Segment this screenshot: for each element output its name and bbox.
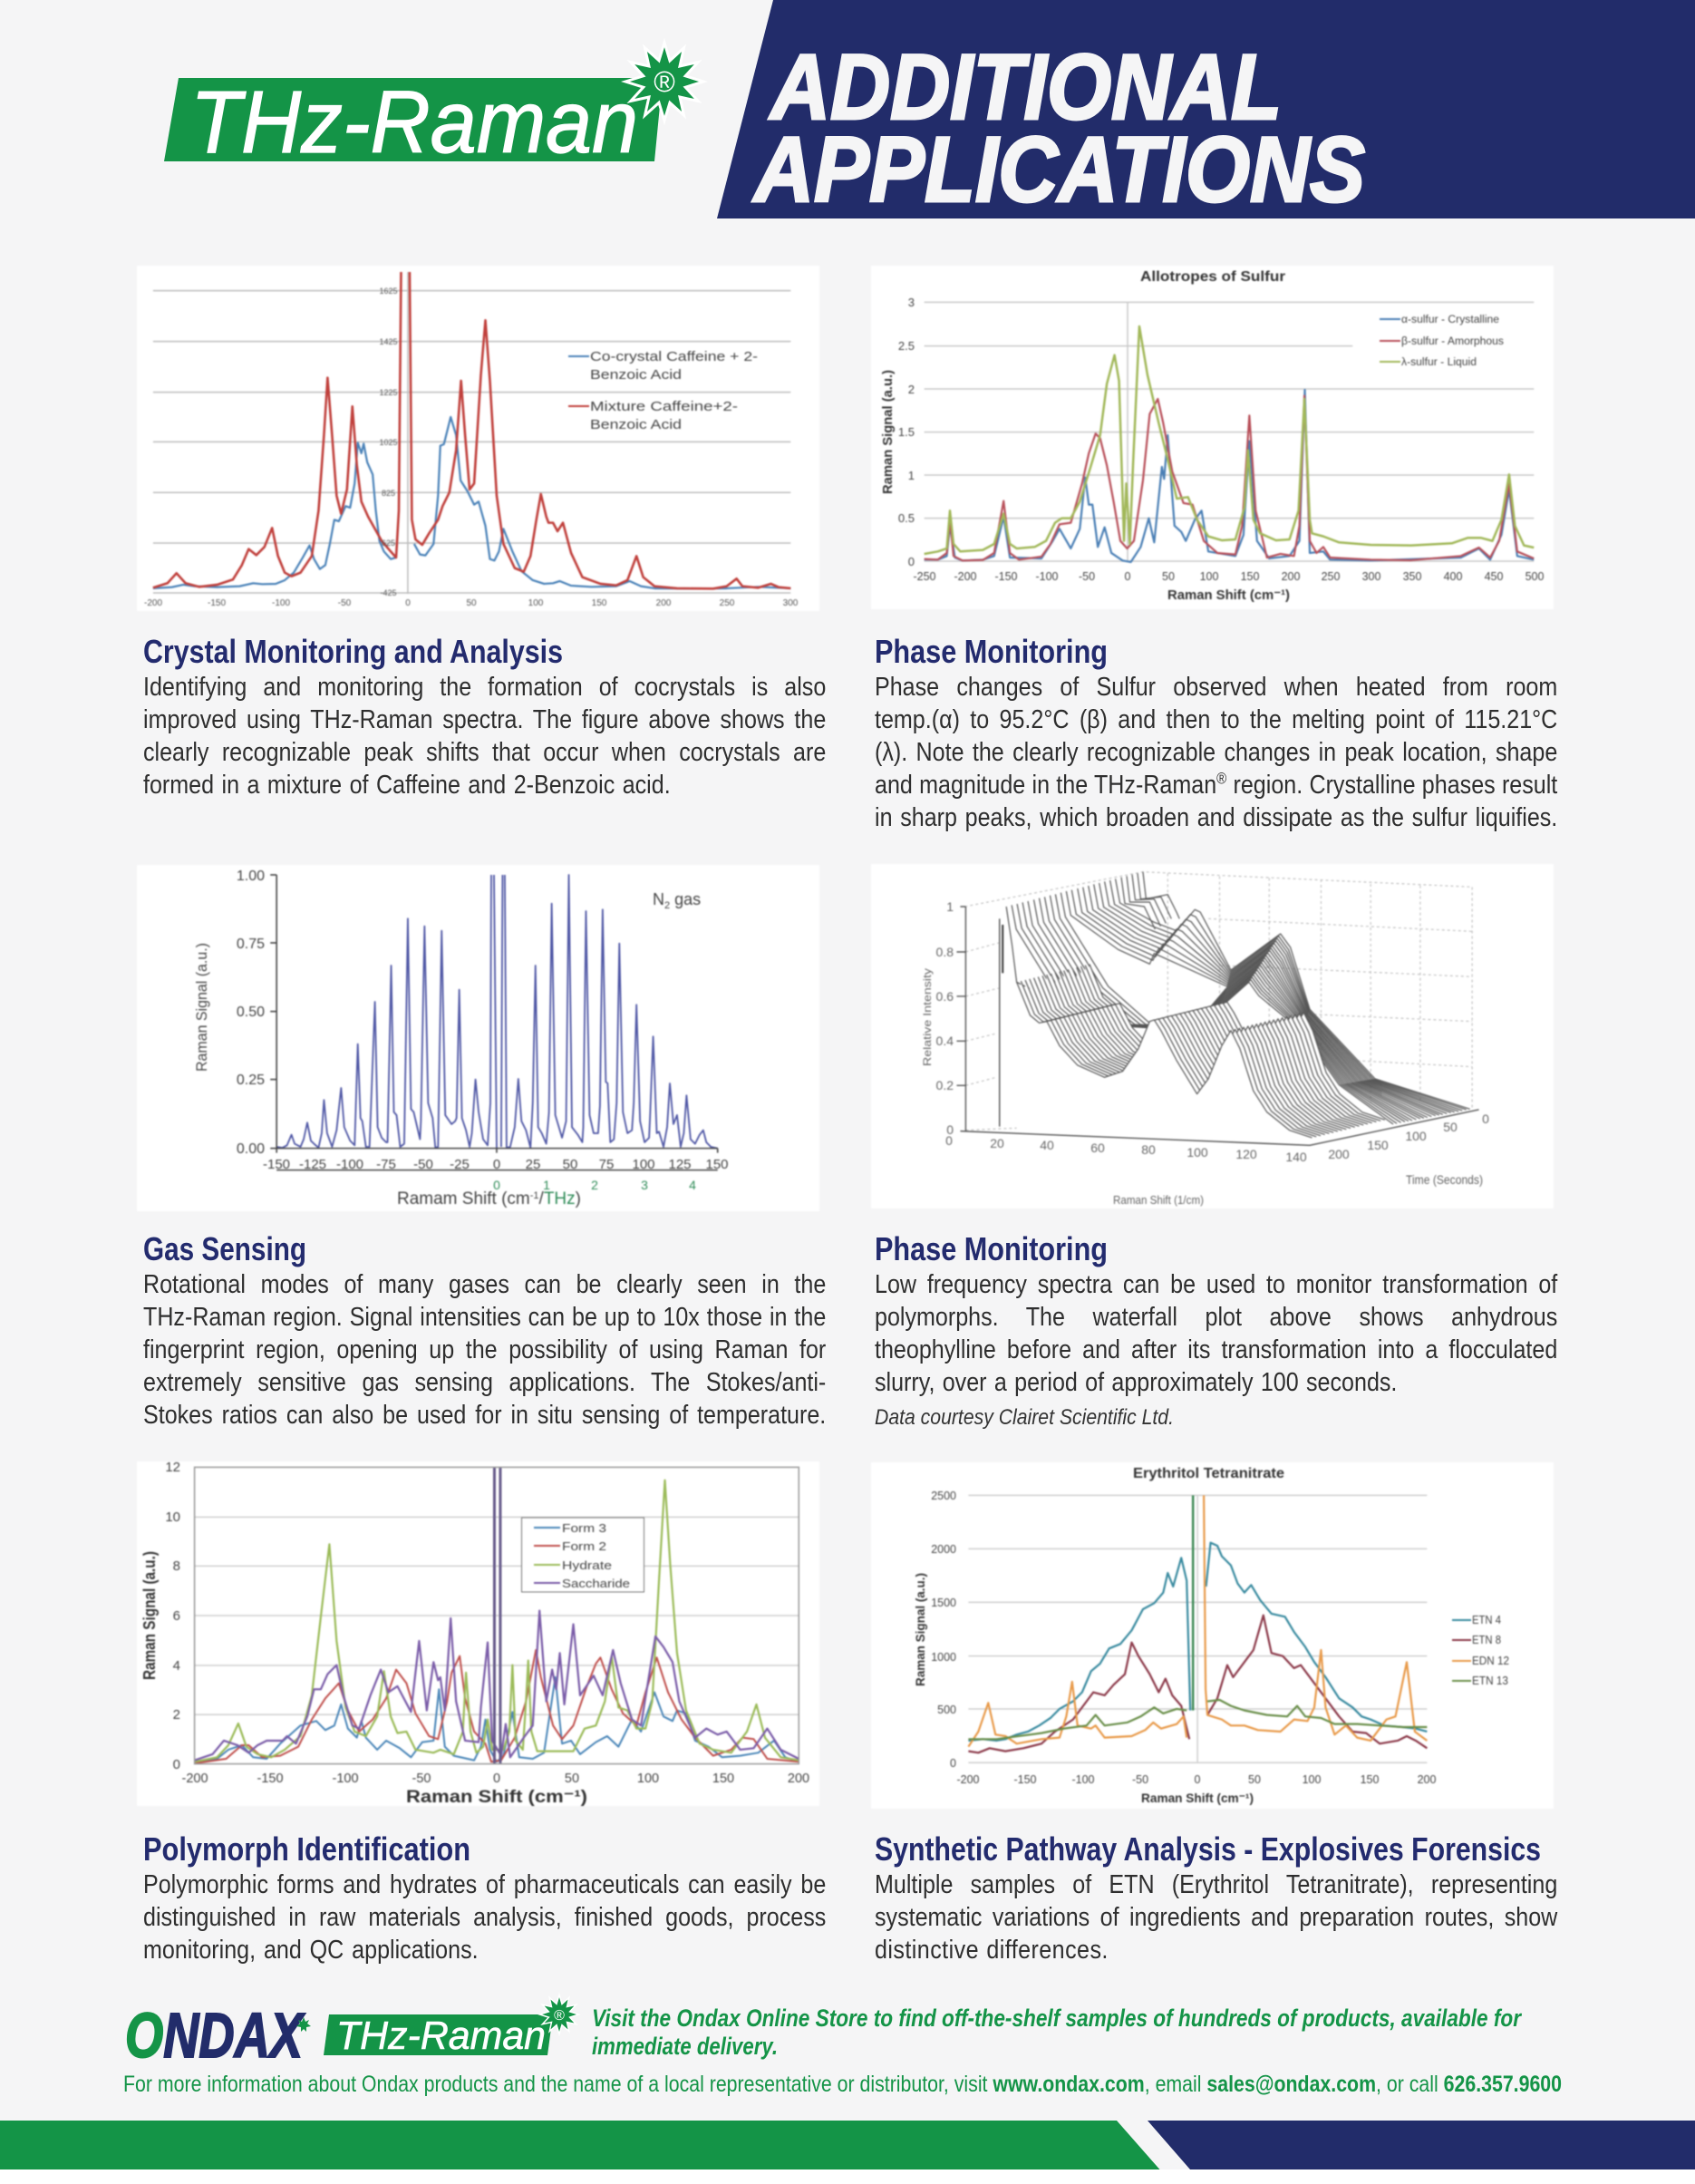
x axis labels: 25 [526, 1157, 540, 1172]
x axis title: THz) [544, 1189, 581, 1208]
x axis title: Raman Shift (cm⁻¹) [1167, 587, 1290, 603]
x axis labels: 150 [712, 1771, 734, 1786]
header band: ADDITIONAL [768, 35, 1282, 139]
annotation: N2 gas: gas [670, 890, 701, 908]
x axis labels: -150 [1013, 1773, 1037, 1786]
x axis labels: 450 [1485, 570, 1503, 583]
y axis labels: 0.6 [936, 989, 954, 1004]
footer call to action: Visit the Ondax Online Store to find off-the-shelf samples of hundreds of products, available for [592, 2004, 1522, 2032]
x axis labels: 100 [1303, 1773, 1321, 1786]
text: synthetic pathway: systematic variations of ingredients and preparation routes, show [875, 1903, 1557, 1932]
curve: co-crystal [153, 417, 790, 588]
curve: Form 3 [195, 1677, 799, 1762]
legend [1452, 1614, 1509, 1687]
y axis labels [237, 869, 265, 1157]
legend: ETN 4 [1472, 1614, 1501, 1626]
y axis labels: 0 [950, 1757, 956, 1770]
y axis labels: 1 [908, 469, 915, 482]
x axis labels: 0 [493, 1771, 500, 1786]
text: synthetic pathway: Multiple samples of ETN (Erythritol Tetranitrate), representing [875, 1870, 1557, 1899]
heading: Polymorph Identification: Polymorph Identification [143, 1830, 470, 1868]
x axis labels: 500 [1526, 570, 1544, 583]
x axis labels [144, 598, 799, 608]
x axis labels: -25 [450, 1157, 470, 1172]
y axis labels: 8 [173, 1558, 180, 1574]
chart: polymorph spectra [137, 1460, 819, 1807]
raman shift tick labels: 140 [1285, 1150, 1307, 1164]
curve: Hydrate [195, 1480, 799, 1762]
logo: Ondax: ONDAX [125, 2000, 305, 2071]
y axis labels: 1.5 [898, 425, 915, 439]
x axis labels: 50 [1248, 1773, 1261, 1786]
y axis title: Raman Signal (a.u.) [880, 370, 896, 494]
legend: Benzoic Acid [590, 367, 682, 383]
raman shift tick labels: 100 [1186, 1145, 1208, 1160]
x axis labels: -50 [412, 1771, 431, 1786]
y axis labels: 0.50 [237, 1005, 265, 1020]
x axis labels: 50 [466, 598, 477, 608]
x axis labels: -150 [257, 1771, 284, 1786]
x axis labels: -50 [1079, 570, 1095, 583]
x axis labels: 300 [783, 598, 799, 608]
time tick labels: 0 [1482, 1111, 1489, 1126]
x axis labels: 250 [720, 598, 735, 608]
text: phase monitoring polymorphs: Low frequency spectra can be used to monitor transformation of [875, 1270, 1557, 1299]
curve: ETN 13 [968, 1700, 1427, 1739]
text: gas sensing: extremely sensitive gas sensing applications. The Stokes/anti- [143, 1368, 826, 1397]
x axis labels: -50 [1132, 1773, 1148, 1786]
chart: N2 gas rotational spectrum [137, 865, 819, 1211]
chart title: Erythritol Tetranitrate [1133, 1466, 1284, 1481]
text: phase monitoring sulfur: Phase changes of Sulfur observed when heated from room [875, 673, 1557, 702]
y axis labels [898, 296, 915, 568]
data credit: Data courtesy Clairet Scientific Ltd. [875, 1405, 1174, 1430]
text: crystal monitoring: formed in a mixture of Caffeine and 2-Benzoic acid. [143, 771, 671, 800]
y axis title: Raman Signal (a.u.) [140, 1551, 159, 1680]
THz axis labels: 0 [493, 1178, 500, 1192]
legend: Form 2 [562, 1539, 606, 1553]
x axis labels: -75 [376, 1157, 396, 1172]
time tick labels: 100 [1405, 1129, 1427, 1143]
text: phase monitoring sulfur: temp.(α) to 95.2°C (β) and then to the melting point of 115.21°C [875, 705, 1557, 734]
x axis title: / [539, 1189, 545, 1208]
y axis labels: 0.00 [237, 1141, 265, 1157]
y axis labels: 4 [173, 1658, 180, 1674]
chart: caffeine cocrystal spectra [137, 266, 819, 611]
time tick labels [1328, 1111, 1489, 1161]
raman shift tick labels: 40 [1040, 1138, 1054, 1152]
x axis labels: 150 [705, 1157, 729, 1172]
text: crystal monitoring [143, 673, 826, 800]
text: polymorph identification: distinguished in raw materials analysis, finished goods, process [143, 1903, 826, 1932]
x axis labels: 250 [1322, 570, 1340, 583]
x axis title: -1 [530, 1190, 539, 1201]
text: gas sensing: Stokes ratios can also be used for in situ sensing of temperature. [143, 1401, 826, 1430]
y axis labels: 0.5 [898, 511, 915, 525]
y axis labels: 1625 [379, 286, 398, 296]
x axis labels: -50 [413, 1157, 433, 1172]
y axis labels: 2 [908, 383, 915, 396]
footer call to action: immediate delivery. [592, 2033, 778, 2060]
y axis labels: 3 [908, 296, 915, 309]
y axis labels: 0 [173, 1757, 180, 1772]
curve: beta sulfur [925, 396, 1534, 560]
y axis labels: 1.00 [237, 869, 265, 884]
x axis title: Raman Shift (cm⁻¹) [406, 1788, 587, 1807]
x axis labels: -100 [336, 1157, 363, 1172]
y axis labels: 0.4 [936, 1034, 954, 1048]
x axis labels: 200 [656, 598, 672, 608]
legend: β-sulfur - Amorphous [1401, 336, 1504, 347]
x axis labels: 200 [788, 1771, 809, 1786]
annotation: N2 gas: 2 [664, 900, 670, 911]
y axis labels: 825 [382, 489, 395, 498]
text: crystal monitoring: Identifying and monitoring the formation of cocrystals is also [143, 673, 826, 702]
y axis labels: 625 [382, 539, 395, 548]
chart: theophylline waterfall plot [871, 864, 1554, 1208]
x axis labels: 100 [632, 1157, 655, 1172]
raman shift tick labels: 120 [1235, 1147, 1257, 1161]
x axis labels [181, 1771, 809, 1786]
x axis labels: -150 [208, 598, 226, 608]
x axis labels: 0 [493, 1157, 500, 1172]
y axis labels: 1225 [379, 388, 398, 397]
y axis labels: 1425 [379, 337, 398, 346]
logo: THz-Raman: THz-Raman [190, 73, 638, 171]
THz axis labels: 3 [641, 1178, 648, 1192]
y axis labels: 1 [946, 899, 954, 914]
text: synthetic pathway: distinctive differences. [875, 1936, 1109, 1965]
x axis labels: -200 [954, 570, 977, 583]
THz axis labels [493, 1178, 696, 1192]
text: phase monitoring sulfur: and magnitude in the THz-Raman® region. Crystalline phases result [875, 771, 1557, 800]
footer band [0, 2121, 1695, 2184]
raman shift tick labels [945, 1133, 1307, 1164]
legend: Benzoic Acid [590, 417, 682, 432]
text: gas sensing: THz-Raman region. Signal intensities can be up to 10x those in the [143, 1303, 826, 1332]
x axis labels: 150 [1361, 1773, 1379, 1786]
chart title: Allotropes of Sulfur [1140, 269, 1285, 285]
x axis labels: 50 [565, 1771, 579, 1786]
y axis title: Relative Intensity [921, 968, 934, 1066]
x axis labels: 350 [1403, 570, 1421, 583]
x axis labels: 0 [1125, 570, 1131, 583]
x axis labels: 125 [668, 1157, 692, 1172]
logo: THz-Raman: ® [654, 65, 675, 98]
text: phase monitoring polymorphs: polymorphs. The waterfall plot above shows anhydrous [875, 1303, 1557, 1332]
x axis labels: 100 [637, 1771, 659, 1786]
y axis labels: -425 [380, 588, 397, 597]
text: gas sensing: fingerprint region, opening up the possibility of using Raman for [143, 1335, 826, 1364]
time tick labels: 150 [1367, 1138, 1389, 1152]
x axis labels: 100 [528, 598, 544, 608]
footer contact line: For more information about Ondax products and the name of a local representative or distributor, visit www.ondax.com, email sales@ondax.com, or call 626.357.9600 [123, 2072, 1562, 2097]
curve: ETN 4 [968, 1543, 1427, 1741]
THz axis labels: 1 [543, 1178, 550, 1192]
curve: Form 2 [195, 1650, 799, 1763]
curve: EDN 12 [968, 1495, 1427, 1747]
text: phase monitoring sulfur: (λ). Note the clearly recognizable changes in peak location, shape [875, 738, 1557, 767]
logo: small THz-Raman [324, 1995, 578, 2058]
heading: Phase Monitoring (waterfall): Phase Monitoring [875, 1230, 1108, 1267]
x axis labels: 200 [1418, 1773, 1436, 1786]
waterfall traces: back family [1006, 872, 1470, 1124]
logo: small THz-Raman: ® [554, 2008, 565, 2024]
curve: Saccharide [195, 1611, 799, 1761]
y axis labels [165, 1460, 180, 1772]
x axis labels: 150 [592, 598, 607, 608]
x axis labels [263, 1157, 729, 1172]
heading: Synthetic Pathway Analysis: Synthetic Pathway Analysis - Explosives Forensics [875, 1830, 1541, 1868]
y axis labels: 2500 [931, 1490, 956, 1502]
x axis labels: -200 [956, 1773, 980, 1786]
legend: EDN 12 [1472, 1655, 1509, 1667]
text: polymorph identification: monitoring, and QC applications. [143, 1936, 479, 1965]
y axis labels: 1000 [931, 1651, 956, 1664]
x axis labels: -50 [338, 598, 352, 608]
text: phase monitoring polymorphs: theophylline before and after its transformation into a flocculated [875, 1335, 1557, 1364]
y axis labels [936, 899, 954, 1137]
x axis labels: -100 [272, 598, 290, 608]
x axis labels [913, 570, 1544, 583]
legend: ETN 13 [1472, 1674, 1508, 1687]
x axis labels: -200 [144, 598, 162, 608]
x axis labels: -150 [263, 1157, 290, 1172]
footer call to action [592, 2004, 1522, 2060]
text: gas sensing: Rotational modes of many gases can be clearly seen in the [143, 1270, 826, 1299]
legend [568, 349, 758, 432]
y axis title: Raman Signal (a.u.) [913, 1573, 927, 1686]
time tick labels: 50 [1443, 1120, 1458, 1134]
x axis title: Raman Shift (cm⁻¹) [1141, 1791, 1254, 1805]
text: synthetic pathway [875, 1870, 1557, 1965]
raman shift tick labels: 20 [990, 1136, 1004, 1150]
chart: allotropes of sulfur [871, 266, 1554, 609]
THz axis labels: 2 [591, 1178, 598, 1192]
legend: Hydrate [562, 1558, 612, 1572]
y axis labels [931, 1490, 956, 1770]
raman shift tick labels: 60 [1090, 1141, 1105, 1155]
heading: Gas Sensing: Gas Sensing [143, 1230, 306, 1267]
x axis labels: 75 [599, 1157, 614, 1172]
legend [522, 1518, 644, 1592]
y axis labels: 1025 [379, 438, 398, 447]
x axis labels: -250 [913, 570, 936, 583]
legend: λ-sulfur - Liquid [1401, 357, 1477, 368]
curve: alpha sulfur [925, 390, 1534, 562]
logo: THz-Raman [164, 43, 703, 171]
text: phase monitoring sulfur [875, 673, 1557, 832]
x axis labels [956, 1773, 1436, 1786]
logo: small THz-Raman: THz-Raman [336, 2014, 546, 2058]
THz axis labels: 4 [689, 1178, 696, 1192]
waterfall traces: front family [1017, 964, 1385, 1151]
curve: lambda sulfur [925, 326, 1534, 554]
y axis labels: 1500 [931, 1597, 956, 1609]
legend: α-sulfur - Crystalline [1401, 315, 1499, 325]
x axis labels: -100 [1071, 1773, 1095, 1786]
y axis labels: 500 [937, 1704, 956, 1716]
heading: Phase Monitoring: Phase Monitoring [875, 633, 1108, 670]
y axis labels: 0 [946, 1122, 954, 1137]
text: phase monitoring polymorphs: slurry, over a period of approximately 100 seconds. [875, 1368, 1397, 1397]
text: crystal monitoring: clearly recognizable peak shifts that occur when cocrystals are [143, 738, 826, 767]
heading: Crystal Monitoring and Analysis: Crystal Monitoring and Analysis [143, 633, 563, 670]
y axis labels: 6 [173, 1608, 180, 1624]
x axis labels: 0 [405, 598, 411, 608]
y axis labels: 0.2 [936, 1078, 954, 1092]
raman shift tick labels: 0 [945, 1133, 953, 1148]
x axis labels: -100 [332, 1771, 359, 1786]
raman shift tick labels: 80 [1141, 1142, 1156, 1157]
x axis labels: -100 [1035, 570, 1059, 583]
time tick labels: 200 [1328, 1147, 1350, 1161]
y axis labels: 2 [173, 1707, 180, 1723]
x axis labels: 400 [1444, 570, 1462, 583]
legend: Form 3 [562, 1521, 606, 1535]
text: crystal monitoring: improved using THz-Raman spectra. The figure above shows the [143, 705, 826, 734]
x axis labels: -200 [181, 1771, 208, 1786]
chart: erythritol tetranitrate [871, 1462, 1554, 1809]
x axis title: Ramam Shift (cm [397, 1189, 530, 1208]
y axis labels: 0.8 [936, 945, 954, 959]
x axis title: Raman Shift (1/cm) [1113, 1193, 1204, 1207]
curve: ETN 8 [968, 1616, 1427, 1752]
y axis labels: 0 [908, 555, 915, 568]
header band [717, 0, 1695, 221]
y axis labels: 2000 [931, 1543, 956, 1556]
x axis labels: -125 [299, 1157, 326, 1172]
x axis labels: -150 [994, 570, 1018, 583]
text: phase monitoring sulfur: in sharp peaks, which broaden and dissipate as the sulfur liquifies. [875, 803, 1557, 832]
y axis labels: 10 [165, 1509, 180, 1525]
text: polymorph identification: Polymorphic forms and hydrates of pharmaceuticals can easily be [143, 1870, 826, 1899]
legend [1380, 315, 1504, 368]
text: polymorph identification [143, 1870, 826, 1965]
y axis labels [379, 286, 398, 597]
legend: Mixture Caffeine+2- [590, 399, 738, 414]
legend: Co-crystal Caffeine + 2- [590, 349, 758, 364]
x axis labels: 50 [563, 1157, 577, 1172]
x axis labels: 150 [1241, 570, 1259, 583]
curve: mixture [153, 272, 790, 588]
y axis labels: 0.75 [237, 937, 265, 952]
x axis labels: 200 [1282, 570, 1300, 583]
x axis labels: 100 [1200, 570, 1218, 583]
y axis labels: 2.5 [898, 339, 915, 353]
legend: Saccharide [562, 1577, 630, 1590]
header band: APPLICATIONS [751, 118, 1365, 221]
annotation: N2 gas: N [653, 890, 664, 908]
x axis labels: 50 [1162, 570, 1175, 583]
legend: ETN 8 [1472, 1634, 1501, 1646]
y axis title: Raman Signal (a.u.) [193, 943, 210, 1072]
y axis labels: 0.25 [237, 1073, 265, 1088]
text: gas sensing [143, 1270, 826, 1430]
x axis labels: 0 [1195, 1773, 1201, 1786]
x axis labels: 300 [1362, 570, 1380, 583]
y axis labels: 12 [165, 1460, 180, 1475]
text: phase monitoring polymorphs [875, 1270, 1557, 1397]
time axis title: Time (Seconds) [1406, 1172, 1483, 1187]
curve: N2 spectrum [276, 875, 718, 1149]
